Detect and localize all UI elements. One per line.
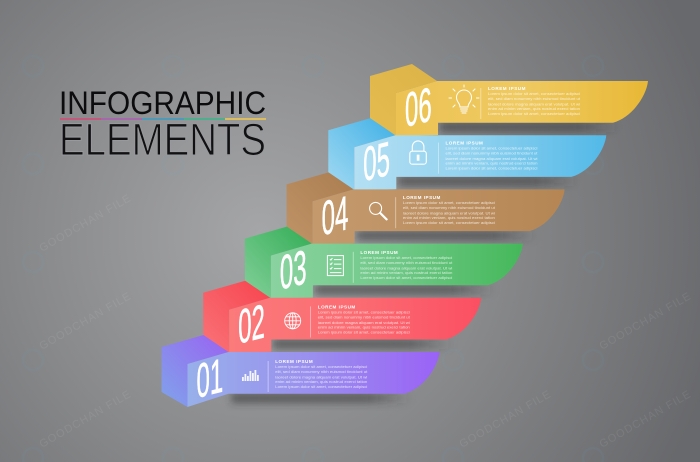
title [59, 85, 266, 165]
divider [394, 197, 397, 228]
text block: laoreet dolore magna aliquam erat volutpat. Ut wi [360, 266, 453, 270]
icon: light bulb [449, 85, 479, 113]
text block [275, 359, 368, 389]
text block: laoreet dolore magna aliquam erat volutpat. Ut wi [403, 212, 495, 216]
text block: LOREM IPSUM [403, 195, 441, 200]
text block: Lorem ipsum dolor sit amet, consectetuer adipisci [403, 201, 495, 205]
block [162, 335, 228, 407]
text block [488, 86, 581, 116]
icon: padlock [410, 141, 426, 164]
text block: Lorem ipsum dolor sit amet, consectetuer adipisci [318, 330, 410, 334]
text block: Lorem ipsum dolor sit amet, consectetuer adipisci [275, 385, 367, 389]
text block: laoreet dolore magna aliquam erat volutpat. Ut wi [318, 321, 410, 325]
title line: infographic: INFOGRAPHIC [59, 85, 266, 121]
watermark pattern: GOODCHAN FILE [458, 388, 554, 451]
step 06 yellow [370, 64, 648, 138]
text block: LOREM IPSUM [318, 304, 356, 309]
step 04 brown [287, 172, 565, 247]
step 03 green [245, 227, 523, 301]
text block: elit, sed diam nonummy nibh euismod tincidunt ut [318, 315, 411, 319]
text block: laoreet dolore magna aliquam erat volutpat. Ut wi [488, 102, 580, 106]
shadow [398, 176, 578, 186]
title line: elements: ELEMENTS [59, 114, 266, 165]
watermark pattern: GOODCHAN FILE [598, 290, 694, 353]
rainbow rule [60, 118, 266, 120]
shadow [357, 230, 537, 240]
text block: enim ad minim veniam, quis nostrud exerci tation [403, 216, 495, 220]
number: 04 [322, 186, 348, 247]
number: 01 [196, 349, 223, 409]
text block: enim ad minim veniam, quis nostrud exerci tation [360, 271, 452, 275]
icon: checklist [327, 256, 343, 276]
text block: Lorem ipsum dolor sit amet, consectetuer adipisci [360, 276, 453, 280]
text block: Lorem ipsum dolor sit amet, consectetuer adipisci [318, 310, 410, 314]
number: 02 [238, 294, 265, 355]
text block: Lorem ipsum dolor sit amet, consectetuer adipisci [488, 92, 580, 96]
text block: Lorem ipsum dolor sit amet, consectetuer adipisci [488, 112, 580, 116]
text block: enim ad minim veniam, quis nostrud exerci tation [318, 325, 410, 329]
divider [437, 143, 440, 174]
text block: Lorem ipsum dolor sit amet, consectetuer adipisci [445, 167, 538, 171]
divider [267, 361, 269, 392]
text block: enim ad minim veniam, quis nostrud exerci tation [488, 107, 580, 111]
text block [445, 141, 538, 171]
divider [309, 306, 312, 337]
text block [403, 195, 496, 225]
shadow [440, 122, 620, 132]
watermark pattern: GOODCHAN FILE [38, 192, 134, 255]
block [203, 281, 270, 353]
text block: LOREM IPSUM [275, 359, 313, 364]
text block: LOREM IPSUM [445, 141, 483, 146]
text block [360, 250, 453, 280]
block [328, 118, 395, 190]
text block: laoreet dolore magna aliquam erat volutpat. Ut wi [275, 376, 367, 380]
shadow [273, 339, 453, 349]
shadow [315, 285, 495, 295]
text block: elit, sed diam nonummy nibh euismod tincidunt ut [488, 97, 581, 101]
icon: globe [285, 313, 301, 329]
number: 06 [405, 78, 432, 138]
number: 05 [363, 132, 390, 193]
step 02 red [203, 281, 481, 355]
step 01 purple [162, 335, 440, 409]
text block: Lorem ipsum dolor sit amet, consectetuer adipisci [360, 256, 453, 260]
text block: enim ad minim veniam, quis nostrud exerci tation [445, 162, 537, 166]
text block: laoreet dolore magna aliquam erat volutpat. Ut wi [445, 157, 538, 161]
icon: magnifier [370, 202, 387, 219]
shadow [232, 393, 412, 403]
number: 03 [280, 240, 307, 301]
text block: enim ad minim veniam, quis nostrud exerci tation [275, 380, 367, 384]
block [245, 227, 312, 299]
text block [318, 304, 411, 334]
divider [480, 88, 482, 119]
watermark pattern: GOODCHAN FILE [38, 290, 134, 353]
block [287, 172, 354, 244]
text block: elit, sed diam nonummy nibh euismod tincidunt ut [445, 152, 538, 156]
watermark pattern: GOODCHAN FILE [38, 388, 134, 451]
divider [352, 252, 355, 283]
text block: LOREM IPSUM [360, 250, 398, 255]
text block: elit, sed diam nonummy nibh euismod tincidunt ut [403, 206, 496, 210]
text block: Lorem ipsum dolor sit amet, consectetuer adipisci [403, 221, 495, 225]
watermark pattern: GOODCHAN FILE [598, 388, 694, 451]
icon: bar chart [242, 370, 259, 381]
block [370, 64, 437, 136]
text block: elit, sed diam nonummy nibh euismod tincidunt ut [275, 370, 368, 374]
text block: Lorem ipsum dolor sit amet, consectetuer adipisci [275, 365, 367, 369]
text block: elit, sed diam nonummy nibh euismod tincidunt ut [360, 261, 453, 265]
step 05 blue [328, 118, 606, 193]
text block: LOREM IPSUM [488, 86, 526, 91]
text block: Lorem ipsum dolor sit amet, consectetuer adipisci [445, 147, 538, 151]
